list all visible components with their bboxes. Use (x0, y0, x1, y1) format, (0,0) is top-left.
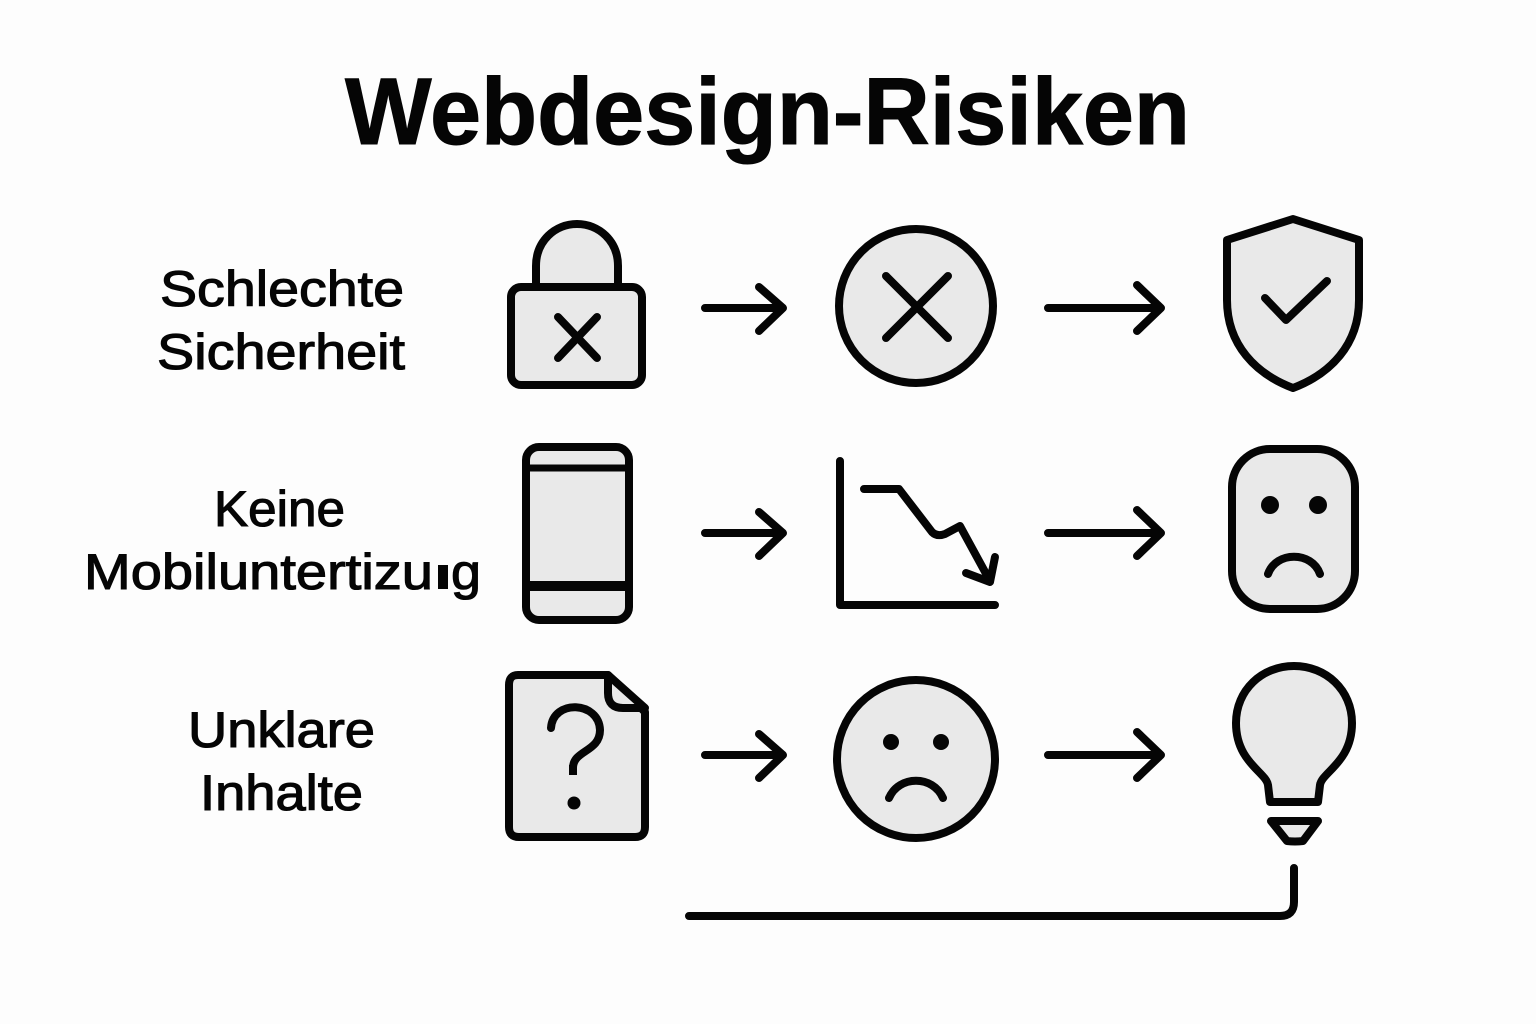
label: Unklare Inhalte: Inhalte (200, 765, 363, 821)
label: Unklare Inhalte: Unklare (188, 702, 375, 758)
icon: declining chart (840, 461, 995, 605)
icon: document with question mark (509, 675, 645, 837)
arrow: row 3 second (1048, 732, 1161, 778)
icon: smartphone (526, 447, 629, 620)
label: Schlechte Sicherheit: Schlechte (160, 261, 404, 317)
label: Keine Mobilunterstützung: Mobiluntertizu (84, 544, 433, 600)
icon: shield with check (1227, 219, 1359, 388)
label: Schlechte Sicherheit (157, 261, 405, 380)
arrow: row 3 first (705, 734, 783, 778)
label: Keine Mobilunterstützung: Keine (214, 481, 345, 537)
arrow: row 1 second (1048, 285, 1161, 331)
icon: sad circle face (837, 680, 995, 838)
connector line (689, 868, 1294, 916)
icon: sad rounded face (1232, 449, 1355, 609)
icon: circle with X (839, 229, 993, 383)
arrow: row 2 first (705, 512, 783, 556)
arrow: row 2 second (1048, 510, 1161, 556)
label: Keine Mobilunterstützung: g (451, 544, 481, 600)
label: Keine Mobilunterstützung (84, 481, 481, 600)
icon: broken lock (511, 224, 642, 385)
label: Schlechte Sicherheit: Sicherheit (157, 324, 405, 380)
arrow: row 1 first (705, 287, 783, 331)
icon: light bulb (1236, 666, 1352, 842)
label: Unklare Inhalte (188, 702, 375, 821)
title: Webdesign-Risiken (345, 59, 1190, 165)
